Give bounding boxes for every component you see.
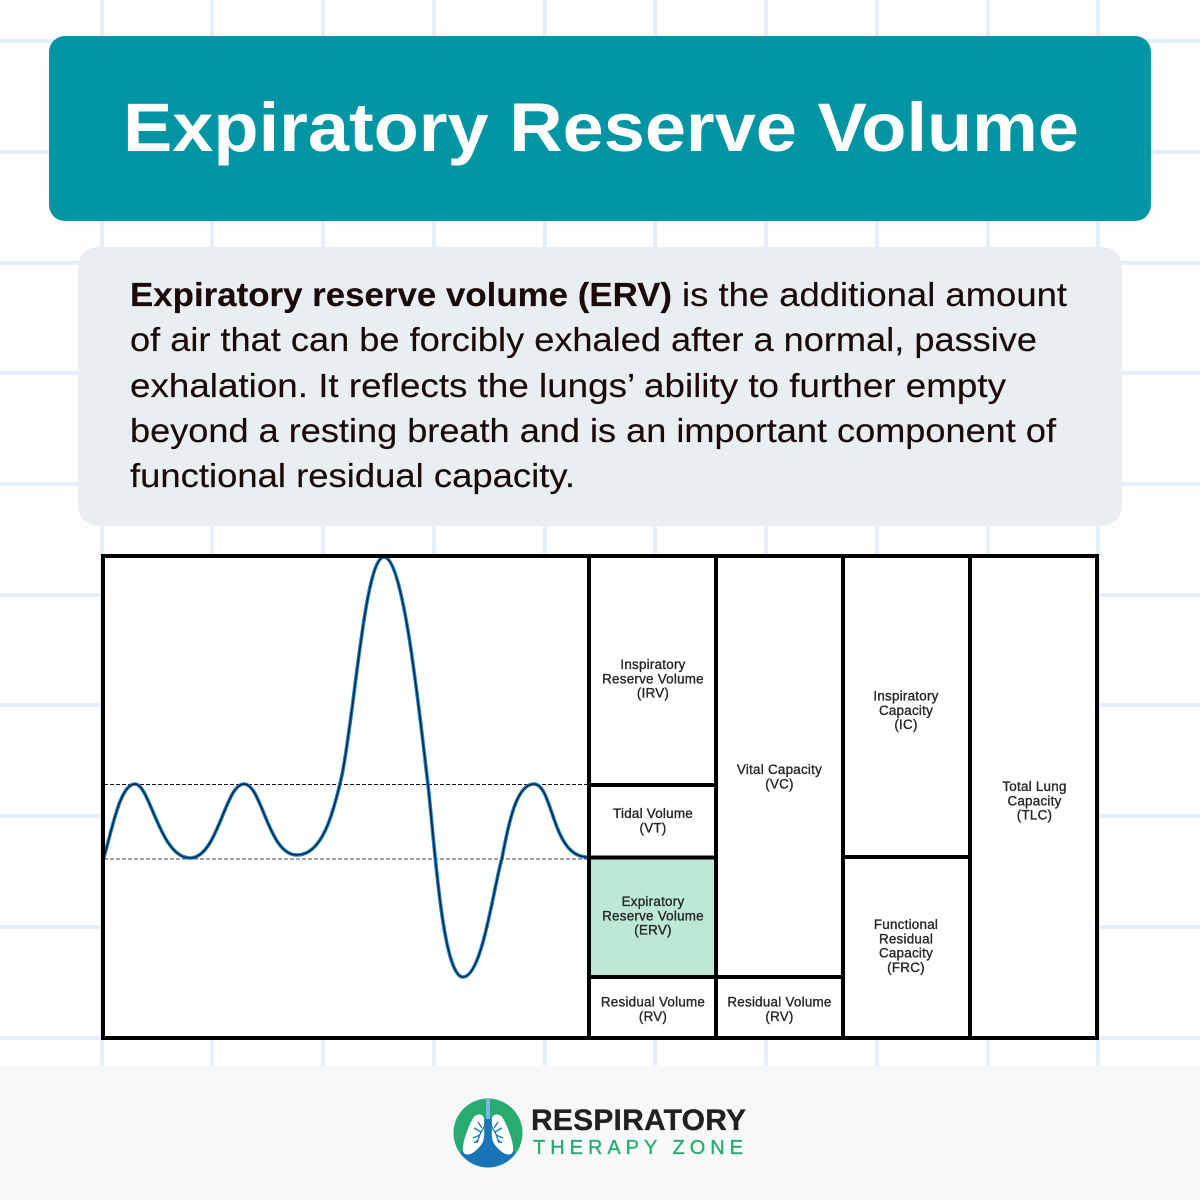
definition text: exhalation. It reflects the lungs’ ability to further empty xyxy=(130,368,1006,405)
label: IRV: Inspiratory xyxy=(620,657,686,672)
label: RV column one: (RV) xyxy=(639,1009,667,1024)
label: VC: (VC) xyxy=(765,776,794,791)
spirometry waveform xyxy=(104,557,587,977)
lung volumes diagram xyxy=(103,556,1097,1040)
label: VT: (VT) xyxy=(639,820,667,835)
label: IC: (IC) xyxy=(894,717,918,732)
label: IC: Inspiratory xyxy=(873,688,939,704)
definition text xyxy=(130,277,1068,495)
label: RV column two: Residual Volume xyxy=(727,994,832,1010)
label: ERV: Reserve Volume xyxy=(602,908,704,923)
label: FRC: Capacity xyxy=(879,946,933,961)
definition text: is the additional amount xyxy=(682,277,1068,314)
label: TLC: (TLC) xyxy=(1017,808,1052,823)
title banner xyxy=(49,36,1151,221)
label: ERV: (ERV) xyxy=(634,923,672,938)
title: Expiratory Reserve Volume xyxy=(123,89,1079,166)
label: RV column two: (RV) xyxy=(765,1009,794,1024)
label: FRC: Residual xyxy=(879,931,933,946)
label: ERV: Expiratory xyxy=(622,894,684,909)
label: TLC: Capacity xyxy=(1007,793,1062,808)
dashed reference lines xyxy=(104,784,589,859)
footer xyxy=(0,1066,1200,1200)
label: IRV: (IRV) xyxy=(637,686,669,701)
table grid xyxy=(103,556,1097,1040)
definition text: of air that can be forcibly exhaled after a normal, passive xyxy=(130,322,1037,359)
label: IRV: Reserve Volume xyxy=(602,671,704,686)
label: TLC: Total Lung xyxy=(1002,779,1067,794)
label: VC: Vital Capacity xyxy=(737,762,822,777)
panel: definition xyxy=(78,247,1122,526)
definition text: beyond a resting breath and is an important component of xyxy=(130,413,1057,450)
brand name: THERAPY ZONE xyxy=(533,1137,743,1159)
icon: lungs logo xyxy=(454,1098,522,1168)
highlighted ERV cell xyxy=(590,858,716,977)
label: FRC: Functional xyxy=(874,917,938,932)
label: IC: Capacity xyxy=(879,703,933,718)
label: VT: Tidal Volume xyxy=(613,806,693,821)
label: FRC: (FRC) xyxy=(887,960,925,975)
definition text: Expiratory reserve volume (ERV) xyxy=(130,277,672,314)
brand name: RESPIRATORY xyxy=(531,1104,746,1137)
brand name xyxy=(531,1104,746,1159)
label: RV column one: Residual Volume xyxy=(601,994,705,1010)
definition text: functional residual capacity. xyxy=(130,458,575,495)
